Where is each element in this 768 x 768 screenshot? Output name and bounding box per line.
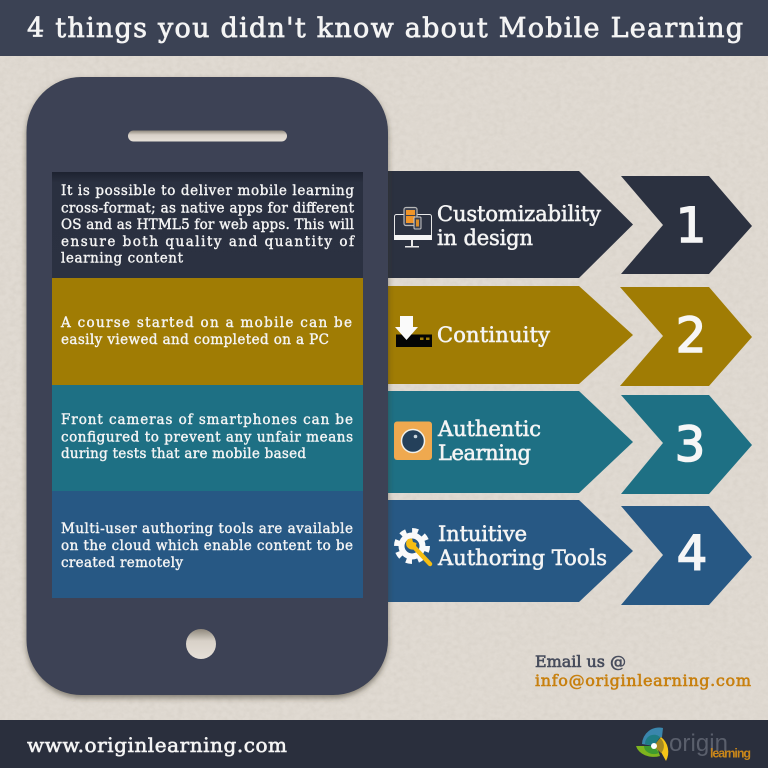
label: intuitive authoring tools: Intuitive (438, 522, 527, 546)
label: customizability in design (437, 202, 601, 250)
logo wordmark (669, 730, 751, 760)
icon: download (395, 316, 432, 347)
screen panel 4: created remotely (61, 555, 183, 571)
screen panel 4 (52, 491, 363, 598)
icon: responsive devices (394, 208, 432, 248)
screen panel 2: A course started on a mobile can be (60, 315, 352, 331)
arrow 1: customizability in design (385, 171, 633, 278)
screen panel 2 (52, 278, 363, 385)
label: customizability in design: in design (437, 226, 533, 250)
screen panel 1: OS and as HTML5 for web apps. This will (61, 217, 354, 233)
number chevron 1: 1 (676, 198, 706, 254)
screen panel 1: cross-format; as native apps for different (61, 200, 355, 216)
logo mark (636, 728, 668, 761)
phone home button (186, 629, 216, 659)
label: intuitive authoring tools: Authoring Tools (437, 546, 607, 570)
logo wordmark: learning (710, 746, 751, 760)
screen panel 1: ensure both quality and quantity of (61, 234, 355, 250)
label: authentic learning (437, 417, 541, 465)
number chevron 2 (620, 287, 752, 386)
label: continuity: Continuity (437, 323, 550, 347)
contact text: info@originlearning.com (535, 671, 751, 690)
number chevron 3 (621, 395, 752, 494)
website: www.originlearning.com (27, 733, 287, 757)
screen panel 2: easily viewed and completed on a PC (61, 332, 329, 348)
contact text (535, 652, 751, 690)
screen panel 3 (52, 385, 363, 491)
screen panel 1: It is possible to deliver mobile learning (61, 183, 354, 199)
arrow 2: continuity (385, 286, 633, 384)
label: customizability in design: Customizability (437, 202, 601, 226)
number chevron 4: 4 (677, 526, 707, 582)
label: intuitive authoring tools (437, 522, 607, 570)
arrow 4: intuitive authoring tools (385, 500, 633, 602)
screen panel 3: Front cameras of smartphones can be (61, 412, 353, 428)
phone speaker (128, 130, 287, 142)
icon: camera (394, 422, 432, 460)
screen panel 3: during tests that are mobile based (61, 446, 306, 462)
number chevron 3: 3 (675, 417, 705, 473)
number chevron 1 (621, 176, 752, 274)
screen panel 4: Multi-user authoring tools are available (61, 521, 353, 537)
title banner (0, 0, 768, 56)
number chevron 2: 2 (676, 308, 706, 364)
arrow 3: authentic learning (385, 391, 633, 493)
label: authentic learning: Authentic (437, 417, 541, 441)
screen panel 1: learning content (61, 250, 184, 266)
screen panel 3: configured to prevent any unfair means (61, 430, 353, 446)
screen panel 1 (52, 172, 363, 278)
number chevron 4 (621, 506, 752, 605)
contact text: Email us @ (535, 652, 626, 671)
title: 4 things you didn't know about Mobile Learning (27, 13, 743, 44)
label: authentic learning: Learning (438, 441, 531, 465)
screen panel 4: on the cloud which enable content to be (61, 538, 353, 554)
icon: gear and wrench (396, 530, 430, 564)
phone body (26, 77, 388, 695)
logo wordmark: origin (669, 730, 728, 757)
footer bar (0, 720, 768, 768)
